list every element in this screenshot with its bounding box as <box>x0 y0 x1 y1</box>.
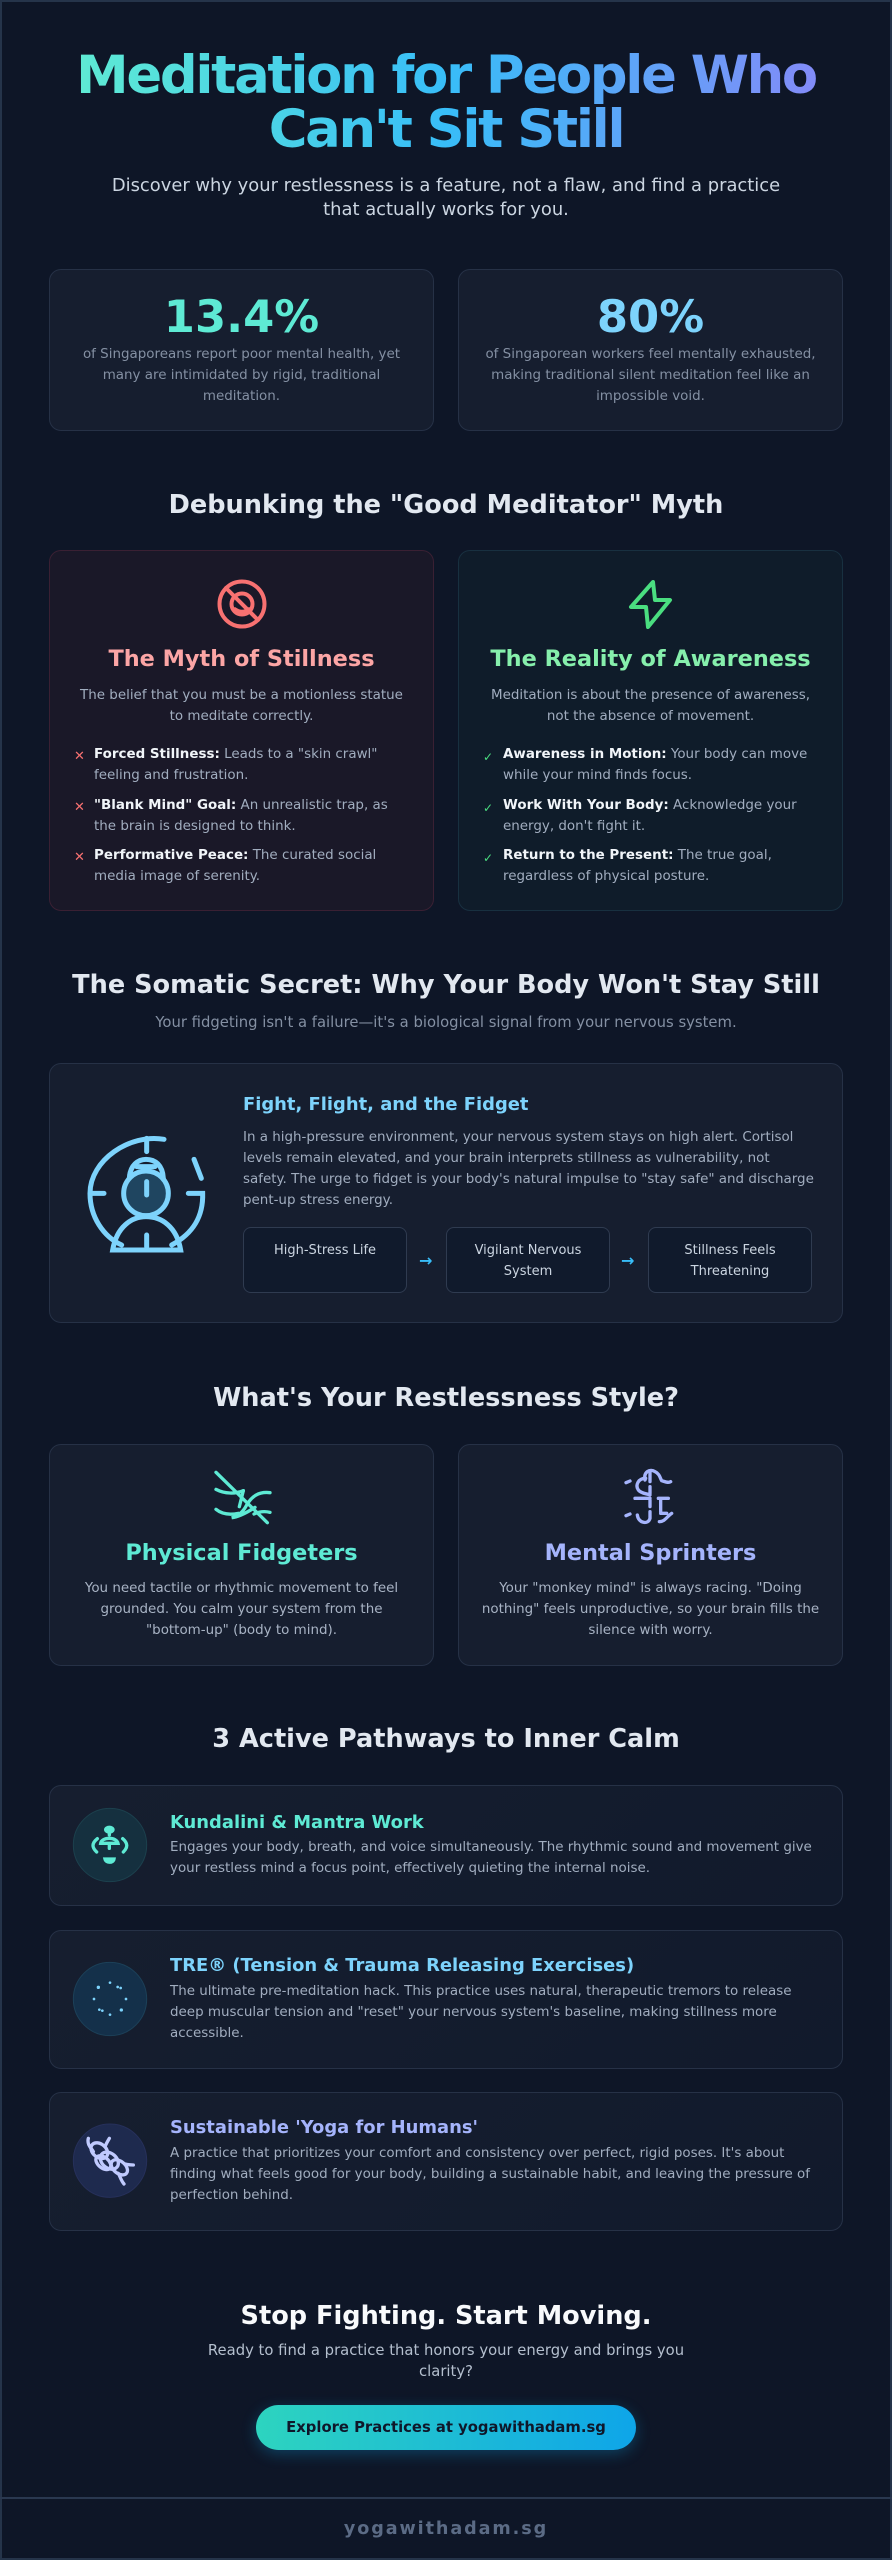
myth list: the brain is designed to think. Performative Peace: The curated social <box>94 819 376 863</box>
kundalini description <box>170 1840 812 1876</box>
myth cross marks: ✕ ✕ ✕ <box>74 749 85 865</box>
heading: somatic secret: The Somatic Secret: Why Your Body Won't Stay Still <box>72 970 820 1000</box>
icon: fidget lines <box>214 1470 272 1524</box>
somatic subheading: Your fidgeting isn't a failure—it's a biological signal from your nervous system. <box>155 1014 737 1031</box>
icon: racing mind <box>624 1468 674 1524</box>
kundalini title: Kundalini & Mantra Work <box>170 1812 424 1833</box>
reality intro: Meditation is about the presence of awareness, <box>491 688 810 703</box>
flow step 1: High-Stress Life <box>274 1243 376 1258</box>
myth list: Forced Stillness: Leads to a "skin crawl" <box>94 747 377 762</box>
panel: stat 80% <box>458 269 843 431</box>
heading: pathways: 3 Active Pathways to Inner Calm <box>212 1724 680 1754</box>
flow step 2 <box>446 1227 610 1293</box>
mental description: nothing" feels unproductive, so your brain fills the <box>482 1602 819 1617</box>
reality list <box>503 747 807 884</box>
icon: kundalini figure <box>72 1808 148 1882</box>
TRE description <box>170 1984 792 2041</box>
flow step 2: System <box>504 1264 552 1279</box>
CTA description: clarity? <box>419 2363 473 2380</box>
reality list: energy, don't fight it. Return to the Present: The true goal, <box>503 819 772 863</box>
icon: meditating figure in a dashed circle <box>88 1136 206 1252</box>
footer: yogawithadam.sg <box>344 2519 548 2539</box>
stat number: 80% <box>597 290 704 343</box>
yoga description: A practice that prioritizes your comfort and consistency over perfect, rigid poses. It's about <box>170 2146 784 2161</box>
myth list: feeling and frustration. "Blank Mind" Goal: An unrealistic trap, as <box>94 768 388 813</box>
yoga title: Sustainable 'Yoga for Humans' <box>170 2117 478 2138</box>
reality list: Awareness in Motion: Your body can move <box>503 747 807 762</box>
panel: physical fidgeters <box>49 1444 434 1666</box>
TRE title: TRE® (Tension & Trauma Releasing Exercises) <box>170 1955 634 1976</box>
CTA button: Explore Practices at yogawithadam.sg <box>286 2419 606 2436</box>
flow step 2: Vigilant Nervous <box>475 1243 581 1258</box>
physical description: "bottom-up" (body to mind). <box>146 1623 337 1638</box>
stat description: of Singaporeans report poor mental health, yet <box>83 347 400 362</box>
panel: kundalini <box>49 1785 843 1906</box>
myth list <box>94 747 388 884</box>
physical title: Physical Fidgeters <box>125 1540 358 1566</box>
physical description: grounded. You calm your system from the <box>101 1602 382 1617</box>
panel: mental sprinters <box>458 1444 843 1666</box>
panel: fight, flight and the fidget <box>49 1063 843 1323</box>
panel: myth of stillness <box>49 550 434 911</box>
icon: lightning <box>628 580 672 629</box>
stat description: meditation. <box>203 389 280 404</box>
kundalini description: Engages your body, breath, and voice simultaneously. The rhythmic sound and movement give <box>170 1840 812 1855</box>
physical description: You need tactile or rhythmic movement to feel <box>85 1581 398 1596</box>
fidget paragraph: pent-up stress energy. <box>243 1193 393 1208</box>
stat description <box>485 347 816 404</box>
fidget paragraph <box>243 1130 814 1208</box>
reality title: The Reality of Awareness <box>490 646 811 672</box>
stat description: many are intimidated by rigid, traditional <box>103 368 380 383</box>
reality intro: not the absence of movement. <box>547 709 754 724</box>
myth intro: The belief that you must be a motionless statue <box>80 688 403 703</box>
fidget paragraph: safety. The urge to fidget is your body's natural impulse to "stay safe" and discharge <box>243 1172 814 1187</box>
CTA button <box>256 2405 636 2450</box>
icon: no stillness <box>218 580 266 628</box>
reality intro <box>491 688 810 724</box>
flow step 3: Stillness Feels <box>684 1243 776 1258</box>
reality check marks: ✓ ✓ ✓ <box>483 750 493 865</box>
footer divider <box>0 2497 892 2499</box>
subtitle: Discover why your restlessness is a feature, not a flaw, and find a practice <box>112 175 780 196</box>
kundalini description: your restless mind a focus point, effectively quieting the internal noise. <box>170 1861 650 1876</box>
TRE description: The ultimate pre-meditation hack. This practice uses natural, therapeutic tremors to release <box>170 1984 792 1999</box>
myth title: The Myth of Stillness <box>108 646 375 672</box>
title: Can't Sit Still <box>269 99 623 160</box>
arrow: → <box>621 1251 634 1270</box>
stat description: of Singaporean workers feel mentally exhausted, <box>485 347 816 362</box>
stat description: impossible void. <box>596 389 705 404</box>
CTA description: Ready to find a practice that honors your energy and brings you <box>208 2342 684 2359</box>
stat number: 13.4% <box>164 290 319 343</box>
fidget paragraph: levels remain elevated, and your brain interprets stillness as vulnerability, not <box>243 1151 770 1166</box>
heading: restlessness style: What's Your Restlessness Style? <box>213 1383 679 1413</box>
panel: stat 13.4% <box>49 269 434 431</box>
title <box>66 49 826 157</box>
myth intro <box>80 688 403 724</box>
physical description <box>84 1581 398 1638</box>
yoga description: finding what feels good for your body, building a sustainable habit, and leaving the pressure of <box>170 2167 810 2182</box>
subtitle <box>112 175 780 220</box>
reality list: regardless of physical posture. <box>503 869 709 884</box>
mental description: Your "monkey mind" is always racing. "Doing <box>499 1581 802 1596</box>
icon: TRE tremor dots <box>72 1962 148 2036</box>
TRE description: accessible. <box>170 2026 244 2041</box>
subtitle: that actually works for you. <box>323 199 569 220</box>
mental description <box>482 1581 819 1638</box>
stat description: making traditional silent meditation feel like an <box>491 368 810 383</box>
panel: yoga for humans <box>49 2092 843 2231</box>
CTA heading: Stop Fighting. Start Moving. <box>241 2301 651 2331</box>
arrow: → <box>419 1251 432 1270</box>
reality list: while your mind finds focus. Work With Your Body: Acknowledge your <box>503 768 797 813</box>
flow step 3: Threatening <box>691 1264 769 1279</box>
icon: yoga knot <box>72 2124 148 2198</box>
TRE description: deep muscular tension and "reset" your nervous system's baseline, making stillness more <box>170 2005 777 2020</box>
yoga description <box>170 2146 810 2203</box>
panel: TRE <box>49 1930 843 2069</box>
flow step 1 <box>243 1227 407 1293</box>
title: Meditation for People Who <box>76 45 816 106</box>
fidget paragraph: In a high-pressure environment, your nervous system stays on high alert. Cortisol <box>243 1130 793 1145</box>
fidget title: Fight, Flight, and the Fidget <box>243 1094 528 1115</box>
yoga description: perfection behind. <box>170 2188 293 2203</box>
myth list: media image of serenity. <box>94 869 260 884</box>
flow step 3 <box>648 1227 812 1293</box>
mental description: silence with worry. <box>588 1623 713 1638</box>
panel: reality of awareness <box>458 550 843 911</box>
stat description <box>83 347 400 404</box>
myth intro: to meditate correctly. <box>170 709 313 724</box>
mental title: Mental Sprinters <box>545 1540 756 1566</box>
CTA description <box>208 2342 684 2380</box>
heading: debunking: Debunking the "Good Meditator" Myth <box>169 490 723 520</box>
